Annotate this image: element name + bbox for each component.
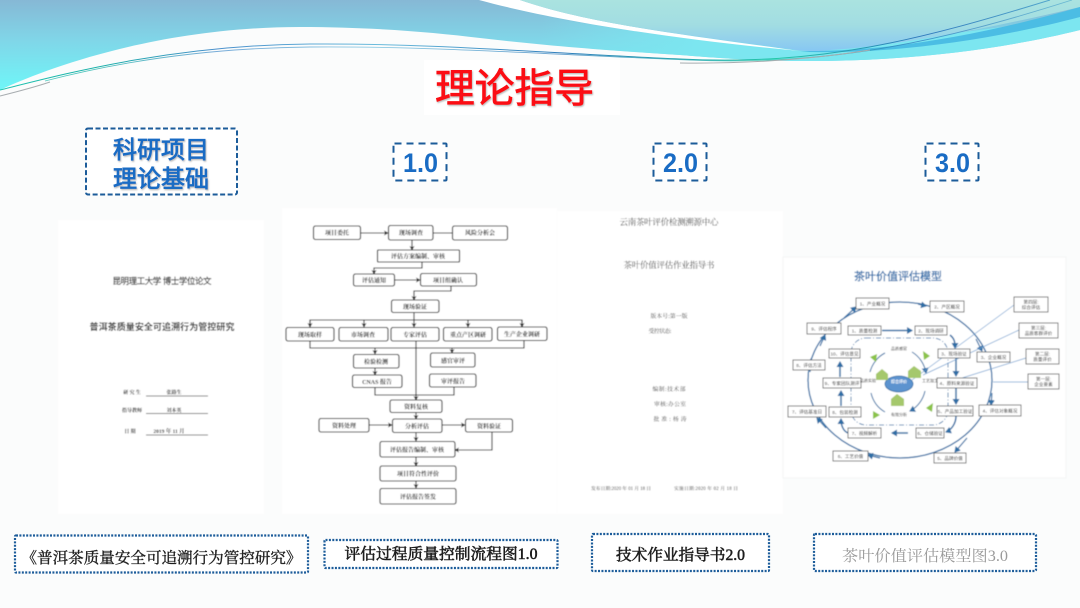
badge 1.0: 1.0: [403, 148, 438, 178]
flowchart boxes: 重点产区调研: [450, 331, 486, 339]
model outer ring boxes: 8、评估方法: [796, 362, 822, 369]
thesis details: 刘本英: [166, 407, 182, 414]
model layer labels: 品质客群评价: [1025, 330, 1053, 337]
caption: flowchart 1.0: 评估过程质量控制流程图1.0: [344, 545, 538, 563]
instruction dates: 发布日期:2020 年 01 月 18 日: [591, 485, 651, 492]
model centre core: 有效分析: [891, 411, 907, 417]
model outer ring boxes: 6、工艺价值: [838, 453, 864, 460]
thesis title: 普洱茶质量安全可追溯行为管控研究: [90, 321, 234, 332]
flowchart boxes: CNAS 报告: [362, 378, 392, 386]
model inner ring boxes: 1、质量检测: [852, 328, 878, 334]
flowchart boxes: 专家评估: [403, 331, 427, 339]
model outer ring boxes: 2、产区概况: [934, 304, 960, 310]
title: 理论指导: [435, 67, 594, 111]
model centre core: 综合评价: [891, 378, 907, 384]
heading: research project theory basis: 理论基础: [113, 166, 209, 193]
model outer ring boxes: 5、品牌价值: [937, 455, 963, 462]
model inner ring boxes: [823, 326, 977, 438]
panel: quality control flowchart: [282, 208, 557, 514]
flowchart boxes: 现场验证: [403, 303, 427, 311]
model outer ring boxes: [788, 298, 1021, 463]
model inner ring boxes: 10、评估意见: [830, 350, 859, 358]
flowchart boxes: 项目符合性评价: [397, 470, 439, 478]
model layer labels: [1014, 297, 1059, 389]
flowchart boxes: [286, 226, 547, 504]
flowchart connectors: [310, 233, 524, 488]
thesis university line: 昆明理工大学 博士学位论文: [112, 276, 212, 286]
model inner ring boxes: 6、仓储验证: [917, 430, 943, 437]
model centre core: 工艺加工: [922, 377, 938, 383]
flowchart boxes: 资料复核: [404, 403, 429, 411]
caption: model 3.0: 茶叶价值评估模型图3.0: [842, 546, 1008, 565]
badge 1.0: [394, 144, 446, 180]
heading: research project theory basis: 科研项目: [113, 137, 209, 164]
flowchart boxes: 风险分析会: [465, 229, 495, 237]
header wave banner: [0, 0, 1080, 96]
instruction dates: 实施日期:2020 年 02 月 18 日: [674, 485, 738, 492]
flowchart boxes: 评估通知: [362, 276, 386, 284]
model outer ring boxes: 3、企业概况: [981, 354, 1007, 361]
flowchart boxes: 分析评估: [405, 422, 429, 430]
badge 3.0: 3.0: [935, 148, 970, 178]
instruction document title: 茶叶价值评估作业指导书: [624, 260, 715, 270]
flowchart boxes: 审评报告: [441, 378, 465, 386]
flowchart boxes: 现场取样: [298, 331, 322, 339]
panel: technical work instruction cover: [557, 211, 783, 514]
model inner ring boxes: 9、专家团队测评: [825, 380, 860, 387]
model layer labels: 第一层:: [1036, 376, 1051, 382]
thesis details: 2019 年 11 月: [153, 427, 185, 435]
thesis details: 张路生: [166, 389, 182, 396]
model rings and connectors: [808, 302, 1028, 458]
title: [424, 60, 620, 115]
flowchart boxes: 生产企业调研: [504, 330, 540, 338]
model layer labels: 第三层:: [1031, 324, 1046, 332]
instruction version and sign-off: [648, 312, 688, 423]
caption: flowchart 1.0: [324, 540, 558, 568]
flowchart boxes: 现场调查: [399, 229, 423, 237]
instruction version and sign-off: 版本号:第一版: [650, 312, 688, 320]
model inner ring boxes: 8、包装检测: [832, 409, 858, 416]
instruction version and sign-off: 编制:技术部: [652, 385, 686, 393]
model inner ring boxes: 3、现场验证: [941, 350, 967, 358]
flowchart boxes: 资料验证: [477, 422, 501, 430]
instruction issuing organisation: 云南茶叶评价检测溯源中心: [620, 217, 719, 227]
flowchart boxes: 评估报告编制、审核: [390, 446, 445, 454]
flowchart boxes: 项目组确认: [433, 276, 463, 284]
model outer ring boxes: 4、评估对象概况: [983, 408, 1018, 414]
model inner ring boxes: 2、现场调研: [918, 328, 944, 334]
instruction version and sign-off: 批准:杨涛: [654, 415, 687, 423]
instruction version and sign-off: 受控状态:: [648, 327, 672, 335]
model layer labels: 第二层:: [1035, 350, 1050, 358]
badge 3.0: [926, 144, 978, 180]
model layer labels: 企业要素: [1034, 381, 1053, 388]
flowchart boxes: 评估方案编制、审核: [391, 252, 446, 260]
flowchart boxes: 项目委托: [325, 229, 349, 237]
caption: thesis title: [15, 536, 308, 572]
thesis details: 研 究 生: [123, 389, 141, 396]
model centre core: 品质实验: [860, 377, 876, 383]
badge 2.0: 2.0: [663, 148, 698, 178]
panel: tea value assessment model: [783, 257, 1066, 478]
model layer labels: 第四层:: [1023, 298, 1039, 306]
caption: instruction 2.0: 技术作业指导书2.0: [616, 546, 745, 564]
model inner ring boxes: 7、视频解析: [852, 430, 878, 437]
model inner ring boxes: 4、原料来源验证: [940, 380, 975, 387]
caption: model 3.0: [814, 534, 1036, 571]
heading: research project theory basis: [86, 128, 237, 194]
model layer labels: 质量评价: [1033, 356, 1052, 363]
badge 2.0: [654, 144, 706, 180]
thesis details: 日 期: [124, 428, 136, 435]
model outer ring boxes: 7、评估基准日: [792, 408, 822, 416]
caption: instruction 2.0: [592, 534, 769, 571]
flowchart boxes: 检验检测: [364, 358, 388, 366]
flowchart boxes: 评估报告签发: [400, 493, 436, 501]
caption: thesis title: 《普洱茶质量安全可追溯行为管控研究》: [22, 549, 302, 567]
flowchart boxes: 市场调查: [351, 331, 375, 339]
model centre core: 品质感官: [891, 345, 907, 351]
instruction version and sign-off: 审核:办公室: [654, 400, 686, 408]
model title: 茶叶价值评估模型: [854, 269, 942, 283]
model inner ring boxes: 5、产品加工验证: [938, 408, 973, 415]
model layer labels: 综合评估: [1022, 304, 1041, 311]
flowchart boxes: 感官审评: [441, 357, 465, 365]
thesis details: [122, 389, 208, 435]
model outer ring boxes: 1、产业概况: [860, 300, 886, 308]
flowchart boxes: 资料处理: [332, 422, 356, 430]
thesis details: 指导教师: [122, 407, 142, 414]
model centre core: [860, 345, 938, 419]
instruction dates: [591, 485, 738, 492]
model outer ring boxes: 9、评估程序: [811, 326, 837, 332]
panel: thesis cover: [58, 220, 264, 514]
